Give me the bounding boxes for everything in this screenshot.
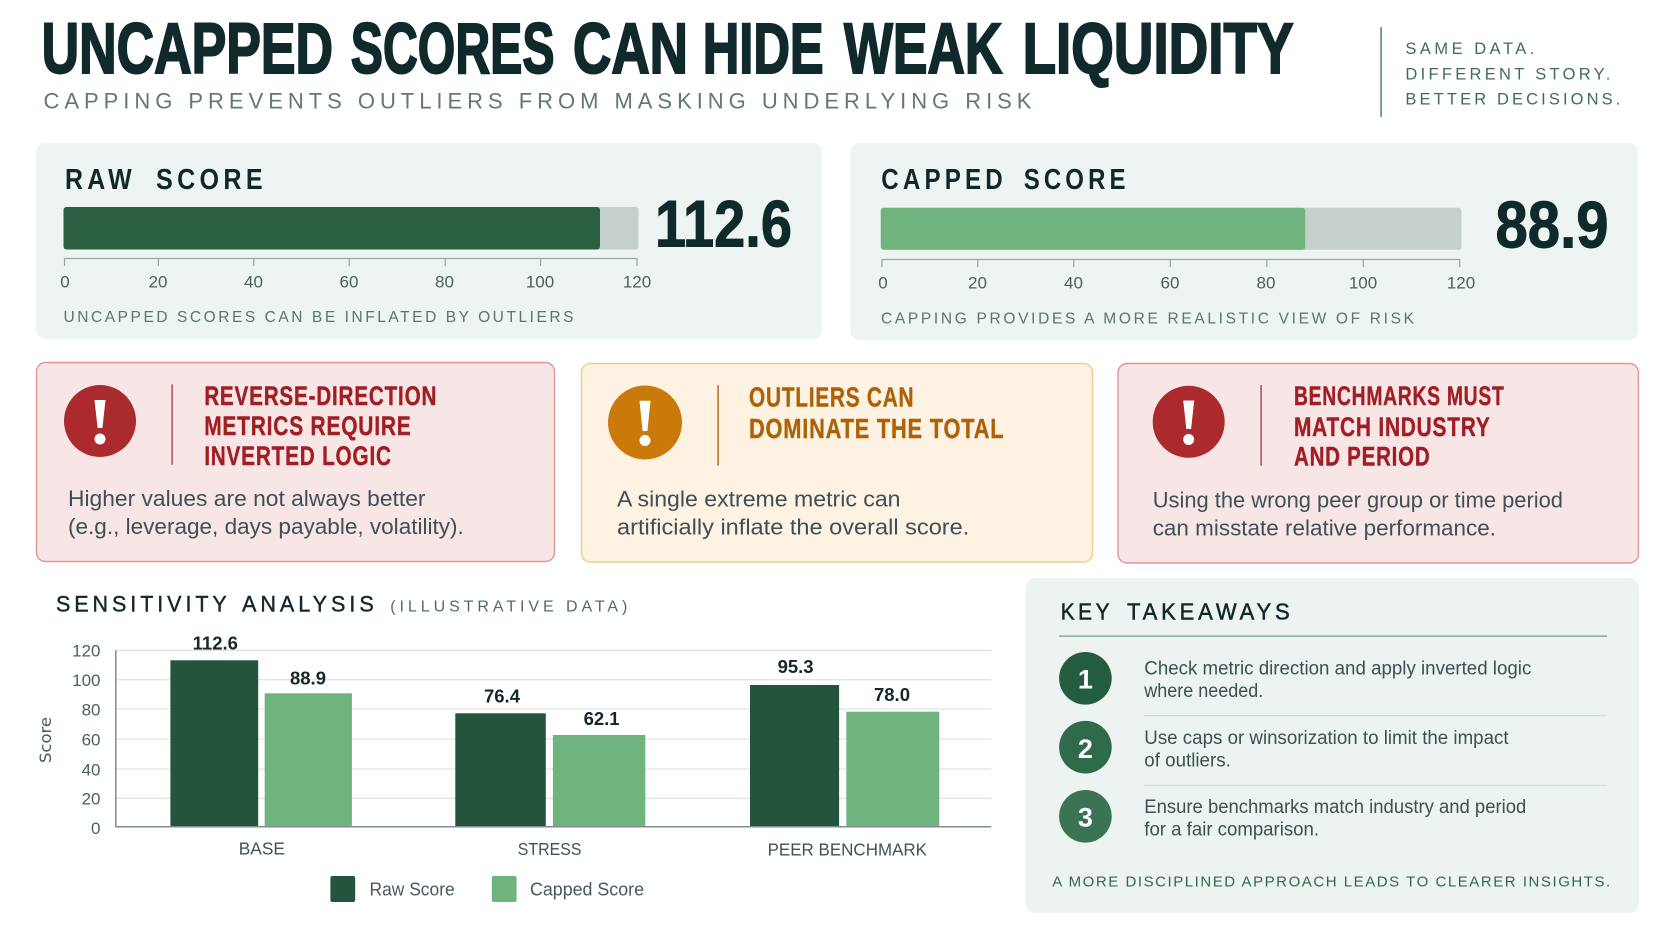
raw score heading: SCORE xyxy=(156,164,267,196)
stress bars: 62.1 xyxy=(584,708,620,729)
panel: raw score xyxy=(36,143,822,339)
y axis labels: 20 xyxy=(82,790,100,809)
raw score axis: 40 xyxy=(244,272,263,292)
warning text: can misstate relative performance. xyxy=(1153,515,1496,540)
takeaway 1 xyxy=(1059,652,1531,705)
capped score heading: SCORE xyxy=(1024,164,1130,196)
base bars xyxy=(170,632,352,827)
takeaway 3: for a fair comparison. xyxy=(1144,819,1319,840)
y axis labels: 60 xyxy=(82,730,100,749)
takeaway 2: Use caps or winsorization to limit the impact xyxy=(1144,728,1509,749)
capped score axis: 0 xyxy=(878,274,888,293)
raw score heading xyxy=(65,164,267,196)
peer benchmark bars xyxy=(750,656,939,827)
title: HIDE xyxy=(703,10,824,89)
warning heading: DOMINATE THE TOTAL xyxy=(749,413,1004,444)
warning heading: REVERSE-DIRECTION xyxy=(204,381,437,411)
warning text xyxy=(68,486,464,539)
capped score heading xyxy=(881,164,1130,196)
y axis labels: 0 xyxy=(91,819,100,838)
warning heading: INVERTED LOGIC xyxy=(204,441,392,471)
takeaway 1: where needed. xyxy=(1143,681,1263,702)
raw score bar xyxy=(64,207,638,250)
raw score axis: 120 xyxy=(623,272,651,292)
base bars: 112.6 xyxy=(193,632,238,653)
peer benchmark bars: 95.3 xyxy=(778,656,814,677)
capped score axis: 100 xyxy=(1349,274,1377,293)
warning text: artificially inflate the overall score. xyxy=(617,514,969,539)
y axis labels xyxy=(72,642,100,838)
sensitivity heading: (ILLUSTRATIVE DATA) xyxy=(390,599,627,616)
warning text: Higher values are not always better xyxy=(68,486,426,511)
warning heading xyxy=(1294,381,1504,472)
warning text: A single extreme metric can xyxy=(617,487,900,512)
panel: reverse-direction warning xyxy=(36,362,554,562)
warning heading: OUTLIERS CAN xyxy=(749,382,914,413)
raw score axis: 60 xyxy=(340,272,358,292)
icon: red exclamation xyxy=(1153,386,1225,458)
raw score axis: 20 xyxy=(149,272,167,292)
category labels: PEER BENCHMARK xyxy=(768,840,927,860)
legend xyxy=(330,876,644,902)
raw score value: 112.6 xyxy=(655,187,792,261)
takeaways heading: KEY xyxy=(1061,598,1113,624)
base bars: 88.9 xyxy=(290,667,326,688)
raw score axis: 80 xyxy=(435,272,454,292)
title: SCORES xyxy=(351,10,554,89)
raw score heading: RAW xyxy=(65,164,136,196)
panel: key takeaways xyxy=(1026,578,1639,913)
takeaway 2: of outliers. xyxy=(1144,751,1231,772)
sensitivity heading xyxy=(56,591,627,616)
takeaway 3: 3 xyxy=(1078,803,1093,833)
y axis title: Score xyxy=(36,717,55,763)
icon: red exclamation xyxy=(64,385,136,457)
panel: outliers warning xyxy=(582,364,1092,562)
warning text xyxy=(1153,487,1563,540)
title: UNCAPPED xyxy=(42,10,333,89)
takeaways heading: TAKEAWAYS xyxy=(1127,598,1294,624)
category labels xyxy=(239,839,927,860)
side tagline: DIFFERENT STORY. xyxy=(1405,65,1610,83)
takeaway 3: Ensure benchmarks match industry and period xyxy=(1144,797,1526,818)
panel: benchmarks warning xyxy=(1118,364,1638,563)
raw score axis: 0 xyxy=(60,272,70,292)
title xyxy=(42,10,1294,89)
capped score axis: 80 xyxy=(1257,274,1275,293)
warning heading: MATCH INDUSTRY xyxy=(1294,412,1491,442)
warning heading: METRICS REQUIRE xyxy=(204,411,412,441)
capped score heading: CAPPED xyxy=(881,164,1007,196)
takeaways heading xyxy=(1061,598,1294,624)
capped score axis xyxy=(878,260,1475,293)
side tagline: SAME DATA. xyxy=(1405,40,1534,58)
subtitle: CAPPING PREVENTS OUTLIERS FROM MASKING UNDERLYING RISK xyxy=(44,88,1032,114)
sensitivity heading: SENSITIVITY xyxy=(56,591,231,616)
takeaway 1: 1 xyxy=(1078,664,1093,694)
panel: capped score xyxy=(850,143,1638,340)
y axis labels: 100 xyxy=(72,671,100,690)
stress bars: 76.4 xyxy=(484,686,521,707)
title: CAN xyxy=(573,10,688,89)
takeaway 2: 2 xyxy=(1078,734,1093,764)
title: LIQUIDITY xyxy=(1023,10,1294,89)
takeaways footer: A MORE DISCIPLINED APPROACH LEADS TO CLEARER INSIGHTS. xyxy=(1052,874,1610,891)
warning heading xyxy=(204,381,437,471)
takeaway 2 xyxy=(1059,721,1509,774)
warning text xyxy=(617,487,969,539)
side tagline: BETTER DECISIONS. xyxy=(1405,91,1620,109)
raw score note: UNCAPPED SCORES CAN BE INFLATED BY OUTLIERS xyxy=(64,309,573,326)
capped score axis: 120 xyxy=(1447,274,1475,293)
warning heading xyxy=(749,382,1004,444)
raw score axis: 100 xyxy=(526,272,554,292)
capped score bar xyxy=(881,208,1461,250)
category labels: BASE xyxy=(239,839,285,859)
title: WEAK xyxy=(844,10,1002,89)
bar chart: sensitivity analysis xyxy=(36,632,991,902)
raw score axis xyxy=(60,258,651,292)
icon: amber exclamation xyxy=(608,386,682,460)
warning heading: AND PERIOD xyxy=(1294,442,1430,472)
peer benchmark bars: 78.0 xyxy=(874,684,910,705)
warning heading: BENCHMARKS MUST xyxy=(1294,381,1504,411)
capped score axis: 40 xyxy=(1064,274,1083,293)
category labels: STRESS xyxy=(518,839,582,859)
warning text: (e.g., leverage, days payable, volatility). xyxy=(68,514,464,539)
capped score axis: 20 xyxy=(968,274,987,293)
y axis labels: 80 xyxy=(82,700,100,719)
stress bars xyxy=(455,686,645,827)
takeaway 1: Check metric direction and apply inverted logic xyxy=(1144,658,1531,679)
warning text: Using the wrong peer group or time period xyxy=(1153,487,1563,512)
capped score axis: 60 xyxy=(1161,274,1179,293)
y axis labels: 40 xyxy=(82,760,100,779)
side tagline xyxy=(1380,27,1620,117)
capped score value: 88.9 xyxy=(1496,187,1608,261)
y axis labels: 120 xyxy=(72,642,100,661)
legend: Capped Score xyxy=(530,880,644,900)
capped score note: CAPPING PROVIDES A MORE REALISTIC VIEW OF RISK xyxy=(881,310,1415,327)
takeaway 3 xyxy=(1059,790,1526,843)
sensitivity heading: ANALYSIS xyxy=(242,591,378,616)
legend: Raw Score xyxy=(370,880,455,900)
